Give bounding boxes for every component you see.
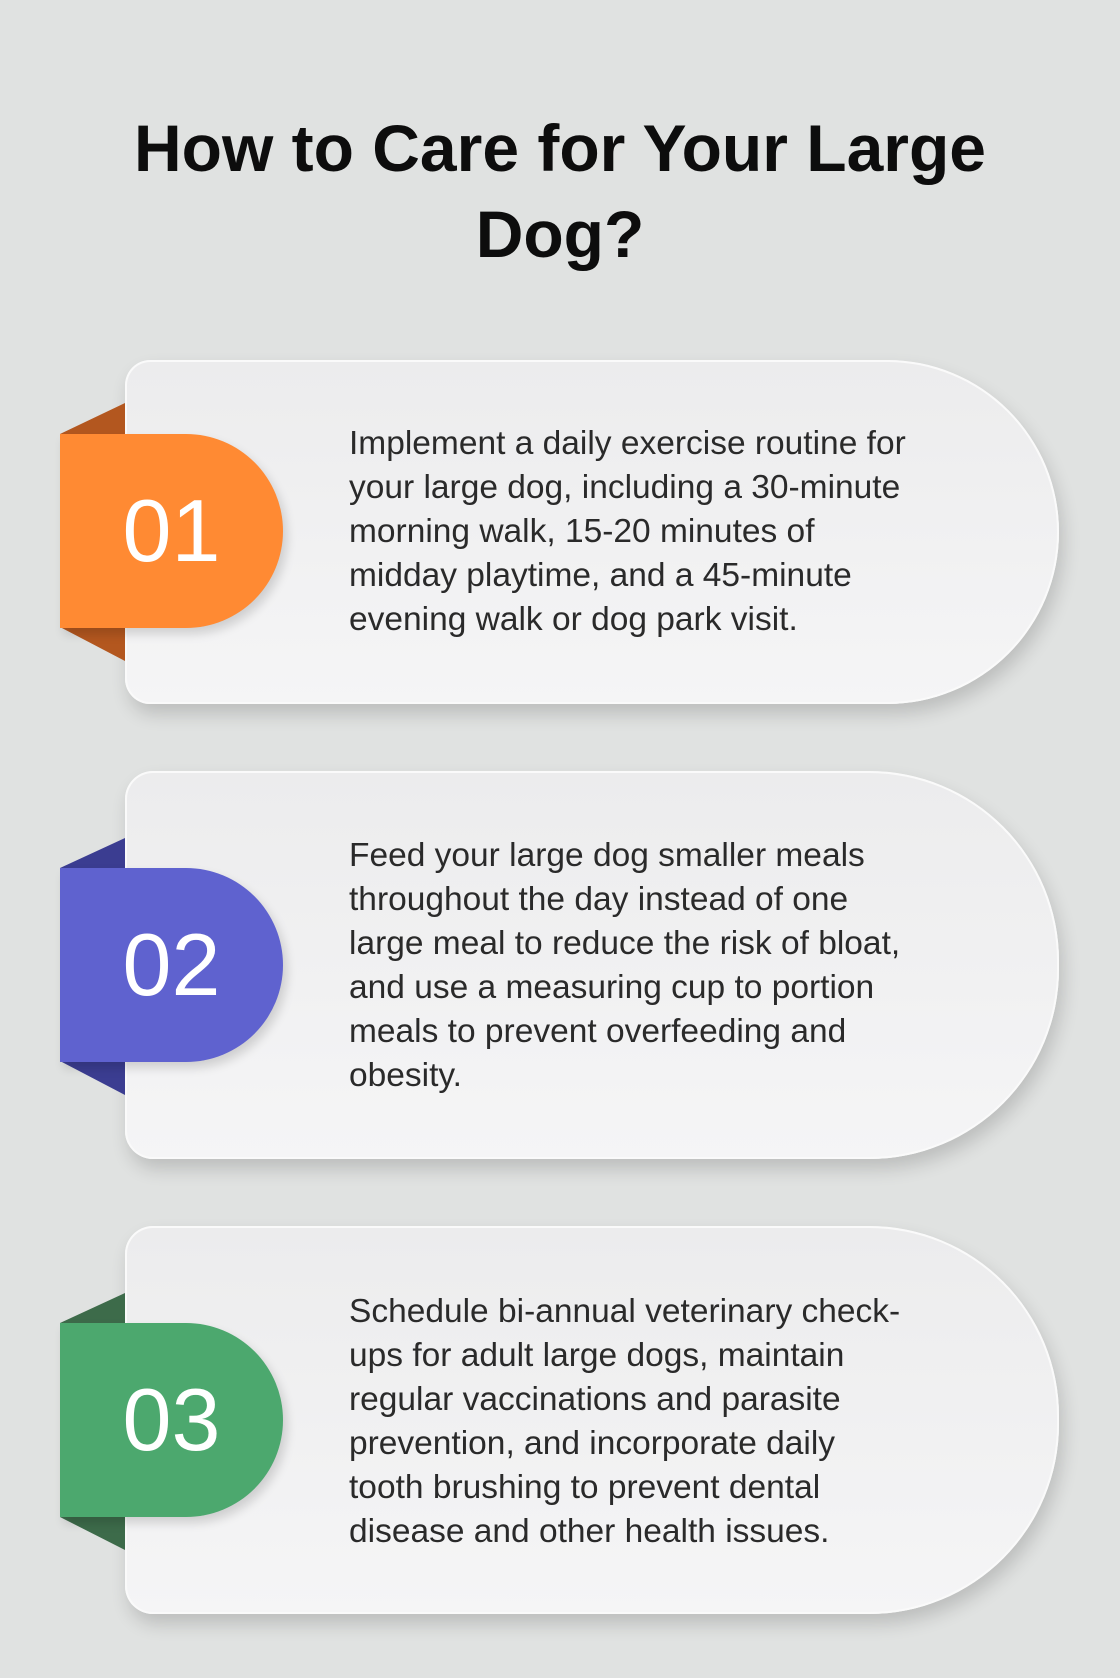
text 01: morning walk, 15-20 minutes of: [349, 513, 814, 550]
card 02: [125, 771, 1059, 1159]
text 02: and use a measuring cup to portion: [349, 969, 874, 1006]
text 02: throughout the day instead of one: [349, 881, 848, 918]
text 03: Schedule bi-annual veterinary check-: [349, 1293, 900, 1330]
text 03: [349, 1293, 900, 1550]
card 03: [125, 1226, 1059, 1614]
title: How to Care for Your Large: [134, 111, 986, 185]
text 03: regular vaccinations and parasite: [349, 1381, 841, 1418]
panel: step 01: [60, 360, 1069, 720]
text 02: Feed your large dog smaller meals: [349, 837, 865, 874]
text 02: large meal to reduce the risk of bloat,: [349, 925, 900, 962]
title: Dog?: [476, 197, 644, 271]
badge 03: 03: [123, 1370, 220, 1469]
text 02: obesity.: [349, 1057, 462, 1094]
text 01: Implement a daily exercise routine for: [349, 425, 906, 462]
title: [134, 111, 986, 271]
text 02: [349, 837, 900, 1094]
text 01: [349, 425, 906, 638]
text 02: meals to prevent overfeeding and: [349, 1013, 846, 1050]
fold 03: [60, 1293, 125, 1550]
text 01: evening walk or dog park visit.: [349, 601, 798, 638]
panel: step 02: [60, 771, 1069, 1176]
card 01: [125, 360, 1059, 704]
text 01: your large dog, including a 30-minute: [349, 469, 900, 506]
text 03: disease and other health issues.: [349, 1513, 829, 1550]
text 01: midday playtime, and a 45-minute: [349, 557, 852, 594]
badge 02: 02: [123, 915, 220, 1014]
badge 02: [60, 868, 283, 1062]
text 03: prevention, and incorporate daily: [349, 1425, 835, 1462]
badge 03: [60, 1323, 283, 1517]
text 03: ups for adult large dogs, maintain: [349, 1337, 844, 1374]
badge 01: [60, 434, 283, 628]
text 03: tooth brushing to prevent dental: [349, 1469, 820, 1506]
fold 01: [60, 403, 125, 661]
fold 02: [60, 838, 125, 1095]
badge 01: 01: [123, 481, 220, 580]
